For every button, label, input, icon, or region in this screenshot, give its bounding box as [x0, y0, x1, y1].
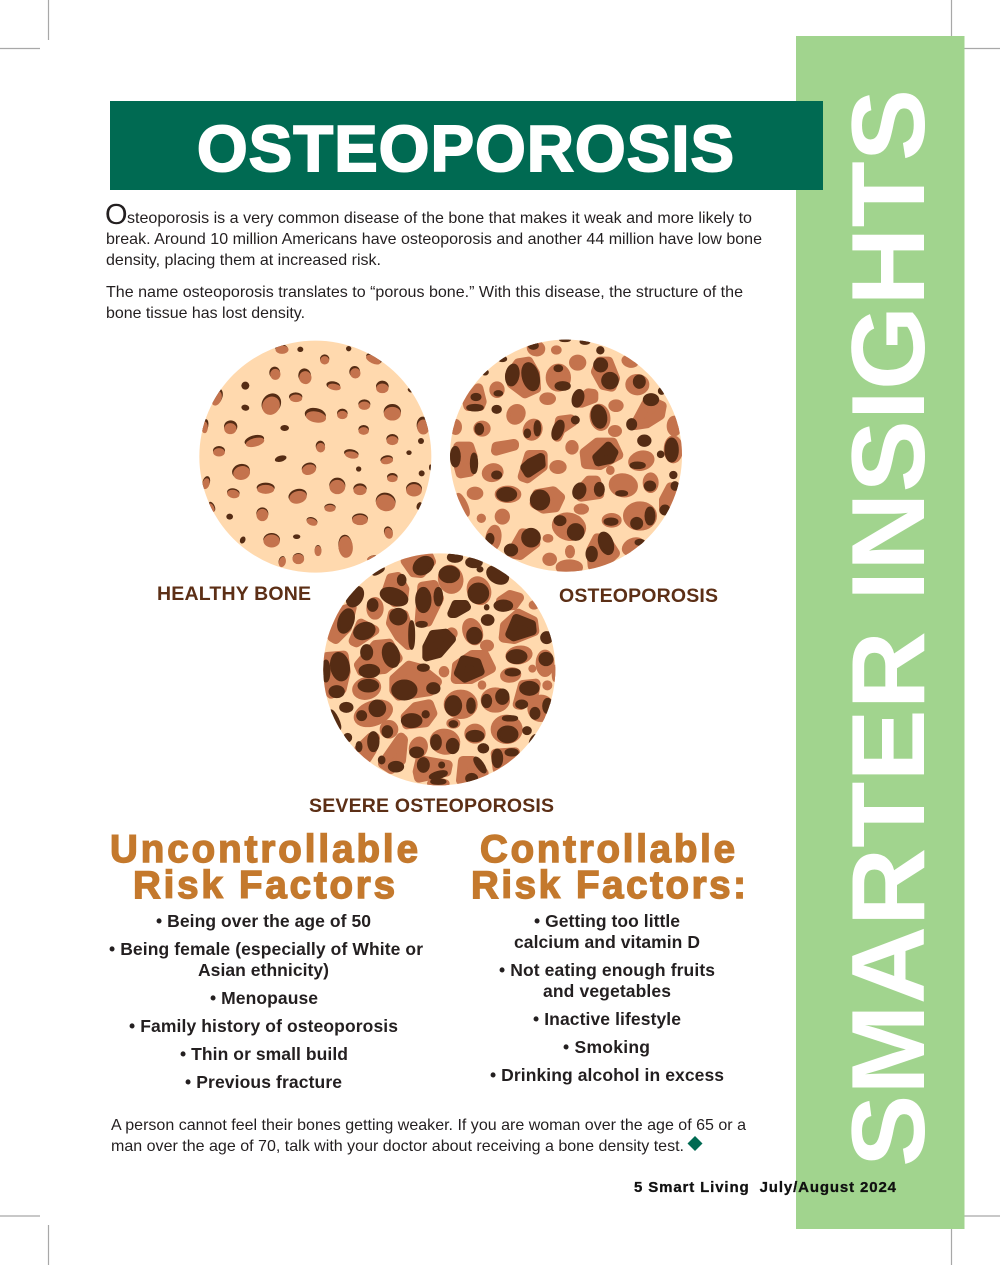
text block: introduction: O: [105, 199, 128, 231]
list: controllable risk factors: • Smoking: [563, 1037, 650, 1057]
label: healthy bone: HEALTHY BONE: [157, 583, 311, 605]
list: uncontrollable risk factors: • Thin or small build: [180, 1044, 348, 1064]
list: controllable risk factors: and vegetables: [543, 981, 671, 1001]
text block: introduction: density, placing them at increased risk.: [106, 252, 381, 269]
list: uncontrollable risk factors: • Previous fracture: [185, 1072, 342, 1092]
text block: closing advice: [111, 1117, 746, 1155]
illustration: healthy bone: [199, 341, 432, 573]
list: controllable risk factors: • Drinking alcohol in excess: [490, 1065, 724, 1085]
list: uncontrollable risk factors: [109, 911, 423, 1092]
list: uncontrollable risk factors: • Being over the age of 50: [156, 911, 371, 931]
panel: green sidebar with vertical title: [796, 36, 964, 1229]
heading: uncontrollable risk factors: Uncontrollable: [110, 828, 418, 871]
title banner: [110, 101, 823, 190]
text block: closing advice: A person cannot feel their bones getting weaker. If you are woman over the age of 65 or a: [111, 1117, 746, 1134]
list: controllable risk factors: [490, 911, 724, 1085]
heading: controllable risk factors: [471, 828, 746, 907]
list: controllable risk factors: • Getting too little: [534, 911, 680, 931]
illustration: osteoporosis bone: [450, 338, 682, 573]
list: controllable risk factors: • Not eating enough fruits: [499, 960, 715, 980]
title banner: OSTEOPOROSIS: [197, 112, 734, 185]
illustration: severe osteoporosis bone: [319, 549, 560, 790]
footer: page and issue: 5 Smart Living July/August 2024: [634, 1179, 897, 1196]
list: uncontrollable risk factors: • Family history of osteoporosis: [129, 1016, 398, 1036]
heading: uncontrollable risk factors: Risk Factors: [133, 864, 395, 907]
list: uncontrollable risk factors: • Being female (especially of White or: [109, 939, 423, 959]
icon: end mark diamond: [688, 1136, 702, 1151]
text block: closing advice: man over the age of 70, talk with your doctor about receiving a bone density test.: [111, 1138, 684, 1155]
text block: introduction: bone tissue has lost density.: [106, 305, 305, 322]
label: severe osteoporosis: SEVERE OSTEOPOROSIS: [309, 795, 554, 817]
text block: introduction: break. Around 10 million Americans have osteoporosis and another 44 million have low bone: [106, 231, 762, 248]
list: controllable risk factors: calcium and vitamin D: [514, 932, 700, 952]
list: controllable risk factors: • Inactive lifestyle: [533, 1009, 681, 1029]
label: osteoporosis: OSTEOPOROSIS: [559, 585, 718, 607]
list: uncontrollable risk factors: Asian ethnicity): [198, 960, 329, 980]
list: uncontrollable risk factors: • Menopause: [210, 988, 318, 1008]
heading: controllable risk factors: Controllable: [480, 828, 735, 871]
panel: green sidebar with vertical title: SMARTER INSIGHTS: [831, 89, 947, 1167]
text block: introduction: steoporosis is a very common disease of the bone that makes it weak and more likely to: [127, 210, 752, 227]
heading: controllable risk factors: Risk Factors:: [471, 864, 746, 907]
text block: introduction: [105, 199, 762, 322]
text block: introduction: The name osteoporosis translates to “porous bone.” With this disease, the structure of the: [106, 284, 743, 301]
heading: uncontrollable risk factors: [110, 828, 418, 907]
